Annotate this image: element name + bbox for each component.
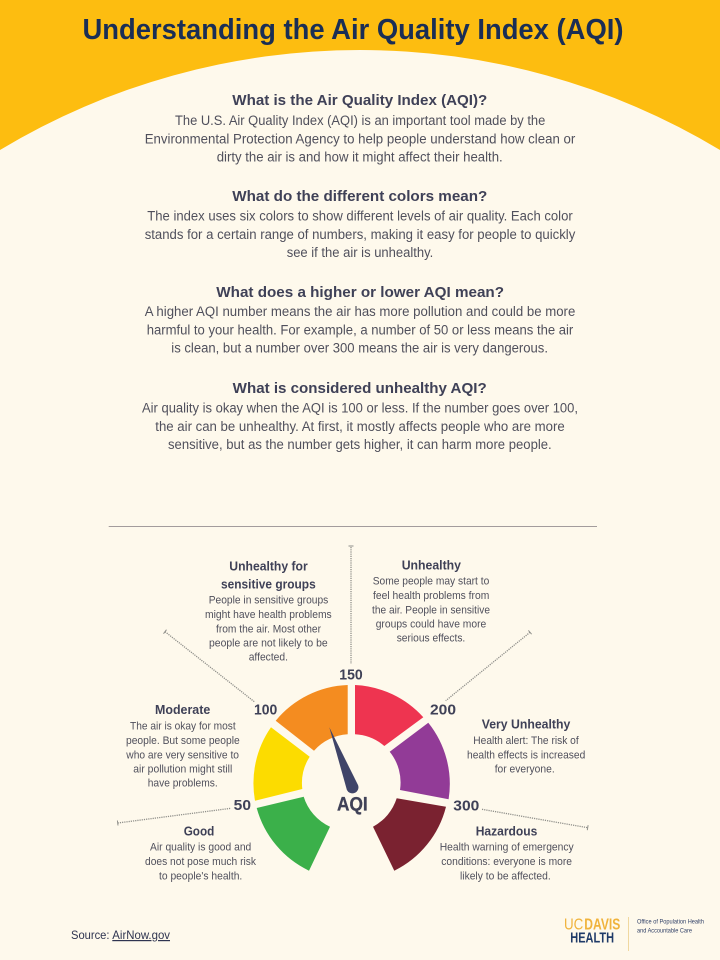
label: hazardous <box>440 824 574 882</box>
yellow header with arc <box>0 0 720 150</box>
label: unhealthy for sensitive groups: People in sensitive groups <box>209 595 328 607</box>
label: very unhealthy: Very Unhealthy <box>482 717 570 731</box>
body text: Air quality is okay when the AQI is 100 or less. If the number goes over 100, <box>142 400 578 416</box>
logo: UC Davis Health: DAVIS <box>584 916 620 933</box>
label: unhealthy for sensitive groups: Unhealthy for <box>229 560 308 574</box>
scale numbers <box>234 667 479 815</box>
label: unhealthy <box>372 558 490 645</box>
logo: UC Davis Health: HEALTH <box>570 930 614 947</box>
heading: What does a higher or lower AQI mean? <box>216 284 504 301</box>
segment: hazardous, maroon <box>373 798 446 871</box>
label: good: Good <box>184 824 214 838</box>
label: good <box>145 824 257 882</box>
body text <box>145 304 575 356</box>
source: AirNow.gov <box>112 928 170 942</box>
body text: sensitive, but as the number gets higher, it can harm more people. <box>168 437 552 452</box>
heading: What is the Air Quality Index (AQI)? <box>232 92 487 109</box>
label: hazardous: conditions: everyone is more <box>441 856 572 868</box>
body text: stands for a certain range of numbers, making it easy for people to quickly <box>145 227 576 242</box>
scale numbers: 150 <box>339 667 363 683</box>
label: unhealthy for sensitive groups: from the air. Most other <box>216 623 321 635</box>
body text: is clean, but a number over 300 means the air is very dangerous. <box>171 340 548 356</box>
label: moderate: people. But some people <box>126 735 240 747</box>
label: hazardous: Hazardous <box>476 824 537 838</box>
logo: UC Davis Health: Office of Population Health <box>637 918 704 925</box>
body text <box>145 113 576 164</box>
label: moderate: Moderate <box>155 703 210 717</box>
leader lines <box>117 546 588 830</box>
label: unhealthy for sensitive groups <box>205 560 332 663</box>
label: hazardous: likely to be affected. <box>460 870 551 882</box>
label: unhealthy: the air. People in sensitive <box>372 604 490 616</box>
heading: What is considered unhealthy AQI? <box>233 380 487 397</box>
gauge label: AQI <box>337 794 368 816</box>
label: unhealthy: feel health problems from <box>373 590 489 602</box>
label: unhealthy: Unhealthy <box>402 558 461 572</box>
body text: Environmental Protection Agency to help people understand how clean or <box>145 132 576 146</box>
label: unhealthy for sensitive groups: might have health problems <box>205 609 332 621</box>
scale numbers: 100 <box>254 703 277 719</box>
label: good: does not pose much risk <box>145 856 257 868</box>
label: very unhealthy: health effects is increased <box>467 749 585 761</box>
body text: The U.S. Air Quality Index (AQI) is an important tool made by the <box>175 113 545 128</box>
body text: dirty the air is and how it might affect their health. <box>217 150 503 164</box>
scale numbers: 300 <box>453 799 479 815</box>
logo: UC Davis Health: and Accountable Care <box>637 927 692 934</box>
label: very unhealthy: for everyone. <box>495 764 555 776</box>
body text <box>145 208 576 260</box>
label: very unhealthy: Health alert: The risk of <box>473 735 579 747</box>
source: Source: <box>71 928 110 942</box>
gauge <box>253 685 450 871</box>
label: moderate: air pollution might still <box>133 764 232 776</box>
segment: unhealthy for sensitive groups, orange <box>276 685 348 751</box>
body text: A higher AQI number means the air has more pollution and could be more <box>145 304 575 319</box>
body text: The index uses six colors to show different levels of air quality. Each color <box>147 208 573 224</box>
label: moderate: have problems. <box>148 778 218 790</box>
label: moderate: The air is okay for most <box>130 721 236 733</box>
label: good: Air quality is good and <box>150 842 251 854</box>
label: unhealthy for sensitive groups: people are not likely to be <box>209 637 328 649</box>
body text <box>142 400 578 452</box>
segment: good, green <box>257 797 330 871</box>
segment: unhealthy, red <box>355 685 423 746</box>
section: higher or lower AQI <box>145 284 575 356</box>
label: very unhealthy <box>467 717 585 776</box>
segment: moderate, yellow <box>253 727 310 801</box>
label: unhealthy for sensitive groups: sensitive groups <box>221 577 316 591</box>
label: moderate: who are very sensitive to <box>125 749 239 761</box>
body text: see if the air is unhealthy. <box>287 245 433 260</box>
section: what is the AQI <box>145 92 576 164</box>
scale numbers: 200 <box>430 703 456 719</box>
label: unhealthy: serious effects. <box>397 633 465 645</box>
needle <box>329 727 358 793</box>
logo: UC Davis Health <box>564 916 704 951</box>
heading: What do the different colors mean? <box>232 188 487 205</box>
body text: the air can be unhealthy. At first, it mostly affects people who are more <box>155 419 565 434</box>
label: moderate <box>125 703 240 790</box>
title: Understanding the Air Quality Index (AQI) <box>82 14 624 46</box>
label: hazardous: Health warning of emergency <box>440 842 574 854</box>
label: unhealthy: Some people may start to <box>373 576 489 588</box>
segment: very unhealthy, purple <box>390 723 450 799</box>
section: what do the colors mean <box>145 188 576 260</box>
scale numbers: 50 <box>234 798 251 814</box>
section: unhealthy AQI <box>142 380 578 452</box>
body text: harmful to your health. For example, a number of 50 or less means the air <box>147 322 574 338</box>
label: good: to people's health. <box>159 870 242 882</box>
source <box>71 928 170 942</box>
label: unhealthy for sensitive groups: affected. <box>249 651 288 663</box>
logo: UC Davis Health: UC <box>564 916 583 933</box>
label: unhealthy: groups could have more <box>376 619 486 631</box>
